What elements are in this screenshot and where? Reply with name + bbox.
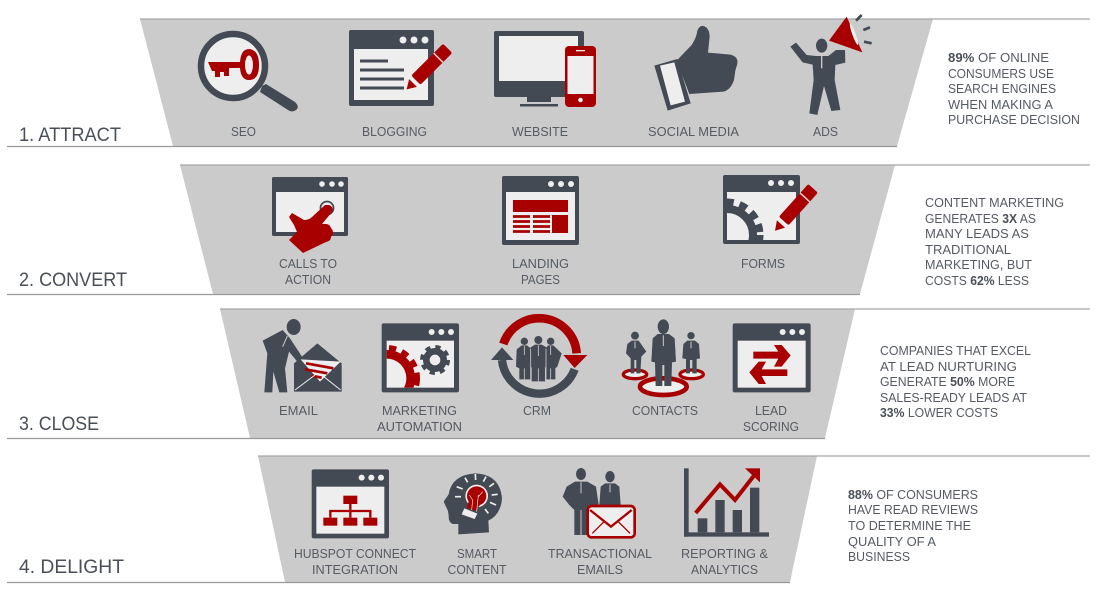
icon: smart content head with light bulb (444, 473, 502, 534)
label: landing pages: LANDING (512, 256, 569, 271)
stat text: convert: TRADITIONAL (925, 242, 1011, 257)
label: website: WEBSITE (512, 124, 568, 139)
stat text: close: SALES-READY LEADS AT (880, 390, 1027, 405)
icon: lead scoring window with arrows (733, 323, 811, 392)
icon: ads man with megaphone (790, 15, 872, 115)
stat text: attract: PURCHASE DECISION (948, 112, 1080, 127)
icon: reporting chart with arrow (684, 468, 769, 537)
label: email: EMAIL (279, 403, 318, 418)
stat text: close: GENERATE 50% MORE (880, 374, 1015, 389)
stat text: attract: CONSUMERS USE (948, 66, 1054, 81)
label: reporting and analytics: REPORTING & (681, 546, 768, 561)
stat text: delight: BUSINESS (848, 549, 910, 564)
label: marketing automation: AUTOMATION (377, 419, 462, 434)
panel: attract stage (7, 15, 1090, 147)
panel: close stage (7, 309, 1090, 438)
label: transactional emails: TRANSACTIONAL (548, 546, 652, 561)
label: smart content (448, 546, 507, 577)
label: SEO: SEO (231, 124, 256, 139)
label: smart content: CONTENT (448, 562, 507, 577)
label: reporting and analytics (681, 546, 768, 577)
stat text: attract: 89% OF ONLINE (948, 50, 1049, 65)
label: blogging: BLOGGING (362, 124, 427, 139)
funnel band: attract (140, 19, 933, 146)
label: ads: ADS (813, 124, 838, 139)
icon: social media thumbs up (654, 26, 737, 111)
icon: website monitor and phone (494, 31, 596, 107)
stat text: attract: SEARCH ENGINES (948, 81, 1056, 96)
stat text: delight: TO DETERMINE THE (848, 518, 971, 533)
icon: transactional emails people and envelope (563, 468, 635, 537)
label: landing pages: PAGES (521, 272, 560, 287)
icon: hubspot connect window with org chart (312, 469, 389, 538)
label: hubspot connect integration: HUBSPOT CONNECT (294, 546, 416, 561)
label: lead scoring: LEAD (755, 403, 787, 418)
label: smart content: SMART (457, 546, 497, 561)
stat text: convert: MANY LEADS AS (925, 226, 1029, 241)
panel: convert stage (7, 165, 1090, 294)
heading: 3. close: 3. CLOSE (19, 414, 99, 435)
label: forms: FORMS (741, 256, 785, 271)
stat text: convert: MARKETING, BUT (925, 257, 1032, 272)
stat text: close: COMPANIES THAT EXCEL (880, 343, 1031, 358)
label: calls to action (279, 256, 337, 287)
stat text: close: AT LEAD NURTURING (880, 359, 1017, 374)
icon: blogging window with pencil (349, 30, 452, 106)
stat text: convert: CONTENT MARKETING (925, 195, 1064, 210)
panel: delight stage (7, 456, 1090, 582)
icon: contacts people on rings (623, 319, 703, 395)
label: marketing automation: MARKETING (382, 403, 457, 418)
stat text: delight: HAVE READ REVIEWS (848, 502, 978, 517)
heading: 4. delight: 4. DELIGHT (19, 557, 124, 578)
stat text: attract: WHEN MAKING A (948, 97, 1053, 112)
label: CRM: CRM (523, 403, 551, 418)
stat text: delight (848, 487, 978, 564)
label: social media: SOCIAL MEDIA (648, 124, 739, 139)
label: marketing automation (377, 403, 462, 434)
stat text: attract (948, 50, 1080, 127)
label: contacts: CONTACTS (632, 403, 698, 418)
stat text: delight: 88% OF CONSUMERS (848, 487, 978, 502)
stat text: close (880, 343, 1031, 420)
icon: CRM cycle with team (491, 318, 587, 394)
funnel band: close (220, 309, 855, 438)
funnel band: convert (180, 165, 895, 294)
label: lead scoring: SCORING (743, 419, 799, 434)
label: calls to action: CALLS TO (279, 256, 337, 271)
icon: landing page window (502, 176, 579, 245)
icon: forms window with gear and pencil (723, 175, 818, 244)
icon: marketing automation window with gears (382, 323, 459, 392)
funnel band: delight (258, 456, 817, 582)
stat text: convert (925, 195, 1064, 288)
stat text: close: 33% LOWER COSTS (880, 405, 998, 420)
heading: 1. attract: 1. ATTRACT (19, 125, 121, 146)
icon: calls to action window with hand (272, 177, 348, 253)
stat text: delight: QUALITY OF A (848, 534, 936, 549)
heading: 2. convert: 2. CONVERT (19, 270, 127, 291)
icon: email man with envelope (263, 319, 342, 392)
stat text: convert: GENERATES 3X AS (925, 211, 1036, 226)
label: transactional emails: EMAILS (577, 562, 623, 577)
label: landing pages (512, 256, 569, 287)
icon: SEO magnifier with key (201, 34, 298, 112)
label: transactional emails (548, 546, 652, 577)
label: hubspot connect integration: INTEGRATION (312, 562, 398, 577)
label: hubspot connect integration (294, 546, 416, 577)
label: lead scoring (743, 403, 799, 434)
label: reporting and analytics: ANALYTICS (691, 562, 758, 577)
stat text: convert: COSTS 62% LESS (925, 273, 1029, 288)
label: calls to action: ACTION (285, 272, 331, 287)
